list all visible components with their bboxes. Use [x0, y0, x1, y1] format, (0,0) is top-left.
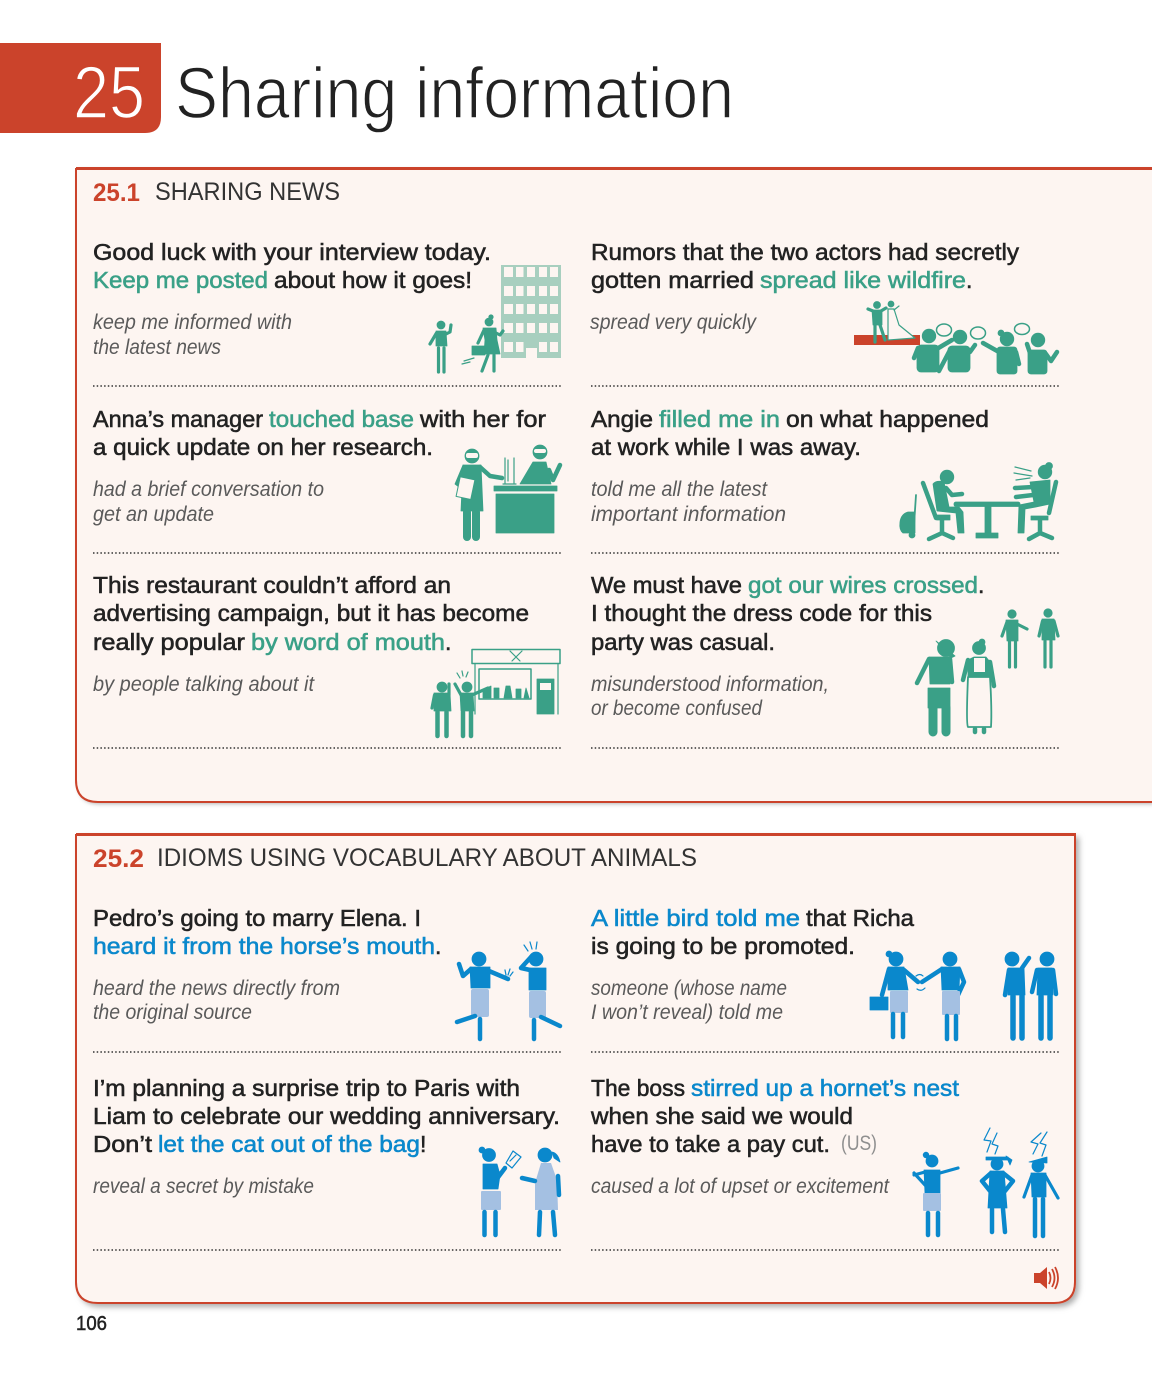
example sentence: ! [420, 1131, 426, 1157]
example sentence: filled me in [659, 406, 780, 432]
example sentence: let the cat out of the bag [158, 1131, 420, 1157]
definition: told me all the latest [591, 478, 768, 501]
definition [93, 478, 324, 526]
example sentence: about how it goes! [274, 267, 472, 293]
definition: keep me informed with [93, 311, 292, 334]
panel: 25.2 idioms using vocabulary about animals [76, 834, 1076, 1304]
definition [93, 977, 340, 1024]
definition: someone (whose name [591, 977, 787, 1000]
panel: 25.1 sharing news [76, 168, 1152, 802]
definition: misunderstood information, [591, 673, 829, 696]
example sentence: on what happened [786, 406, 989, 432]
example sentence: (US) [841, 1132, 877, 1155]
entry: keep me posted [93, 239, 491, 359]
divider [93, 552, 561, 554]
heading 25.1: 25.1 [93, 179, 140, 207]
divider [591, 385, 1059, 387]
example sentence: . [435, 933, 441, 959]
example sentence: . [978, 572, 984, 598]
definition: had a brief conversation to [93, 478, 324, 501]
example sentence [591, 572, 984, 655]
example sentence: Keep me posted [93, 267, 268, 293]
example sentence: really popular [93, 629, 245, 655]
entry: spread like wildfire [590, 239, 1020, 334]
entry: a little bird told me [591, 905, 914, 1024]
definition [93, 311, 292, 359]
definition: I won’t reveal) told me [591, 1001, 783, 1024]
example sentence: Rumors that the two actors had secretly [591, 239, 1020, 265]
example sentence: Liam to celebrate our wedding anniversary. [93, 1103, 560, 1129]
heading 25.2: 25.2 [93, 845, 144, 873]
icon: woman holding tickets and friend [479, 1147, 560, 1235]
definition [591, 977, 787, 1024]
divider [93, 747, 561, 749]
example sentence: Angie [591, 406, 653, 432]
definition: spread very quickly [590, 311, 757, 334]
example sentence: is going to be promoted. [591, 933, 855, 959]
heading 25.1 [93, 178, 340, 207]
example sentence: when she said we would [590, 1103, 853, 1129]
icon: handshake and two men whispering [870, 951, 1056, 1039]
icon: office building with two people [430, 265, 561, 372]
example sentence [93, 239, 491, 293]
chapter number tab [0, 43, 161, 134]
example sentence: touched base [269, 406, 414, 432]
definition: important information [591, 503, 786, 526]
example sentence: spread like wildfire [760, 267, 966, 293]
definition [591, 478, 786, 526]
example sentence: with her for [419, 406, 546, 432]
divider [591, 747, 1059, 749]
example sentence: heard it from the horse’s mouth [93, 933, 435, 959]
example sentence: This restaurant couldn’t afford an [93, 572, 451, 598]
example sentence [590, 1075, 960, 1157]
example sentence: advertising campaign, but it has become [93, 600, 529, 626]
icon: casual couple and formal couple [917, 609, 1058, 732]
heading 25.2: IDIOMS USING VOCABULARY ABOUT ANIMALS [157, 844, 697, 872]
example sentence: that Richa [806, 905, 914, 931]
icon: two people pointing at a restaurant [432, 650, 560, 736]
example sentence: The boss [591, 1075, 685, 1101]
example sentence: party was casual. [591, 629, 775, 655]
chapter number tab: 25 [73, 51, 145, 134]
example sentence: . [966, 267, 972, 293]
example sentence: Pedro’s going to marry Elena. I [93, 905, 421, 931]
definition: reveal a secret by mistake [93, 1175, 314, 1198]
divider [591, 1051, 1059, 1053]
example sentence: a quick update on her research. [93, 434, 433, 460]
example sentence: We must have [591, 572, 742, 598]
definition: or become confused [591, 697, 763, 720]
example sentence: A little bird told me [591, 905, 800, 931]
heading 25.1: SHARING NEWS [155, 178, 340, 206]
icon: two people in conversation [457, 942, 560, 1039]
divider [591, 552, 1059, 554]
example sentence [93, 905, 441, 959]
icon: two scientists at a lab bench [455, 445, 560, 537]
icon: boss and two upset employees [914, 1128, 1058, 1236]
example sentence [591, 239, 1020, 293]
example sentence: gotten married [591, 267, 754, 293]
example sentence [93, 572, 529, 655]
example sentence: Anna’s manager [93, 406, 263, 432]
definition [591, 673, 829, 720]
definition: the latest news [93, 336, 221, 359]
example sentence: by word of mouth [251, 629, 445, 655]
example sentence [93, 406, 546, 460]
definition: get an update [93, 503, 214, 526]
definition: caused a lot of upset or excitement [591, 1175, 890, 1198]
entry: horse's mouth [93, 905, 441, 1024]
entry: stirred up a hornet's nest [590, 1075, 960, 1198]
definition: heard the news directly from [93, 977, 340, 1000]
icon: two people talking at a table, with suitcase [900, 462, 1056, 539]
icon: wedding couple and gossiping crowd [854, 301, 1057, 374]
entry: touched base [93, 406, 546, 526]
example sentence: Good luck with your interview today. [93, 239, 491, 265]
divider [93, 1249, 561, 1251]
example sentence: Don’t [93, 1131, 153, 1157]
icon: audio speaker [1034, 1267, 1058, 1289]
entry: by word of mouth [93, 572, 529, 696]
divider [591, 1249, 1059, 1251]
example sentence: at work while I was away. [591, 434, 861, 460]
example sentence [591, 406, 989, 460]
definition: the original source [93, 1001, 252, 1024]
entry: filled me in [591, 406, 989, 526]
definition: by people talking about it [93, 673, 315, 696]
entry: got our wires crossed [591, 572, 984, 720]
example sentence [93, 1075, 560, 1157]
divider [93, 385, 561, 387]
page number: 106 [76, 1313, 107, 1335]
title: Sharing information [175, 54, 734, 134]
example sentence: I’m planning a surprise trip to Paris with [93, 1075, 520, 1101]
example sentence [591, 905, 914, 959]
crowd [914, 329, 1057, 374]
chapter header [0, 43, 734, 134]
example sentence: . [445, 629, 451, 655]
divider [93, 1051, 561, 1053]
entry: let the cat out of the bag [93, 1075, 560, 1198]
example sentence: I thought the dress code for this [591, 600, 932, 626]
example sentence: have to take a pay cut. [591, 1131, 830, 1157]
example sentence: stirred up a hornet’s nest [691, 1075, 960, 1101]
example sentence: got our wires crossed [748, 572, 978, 598]
